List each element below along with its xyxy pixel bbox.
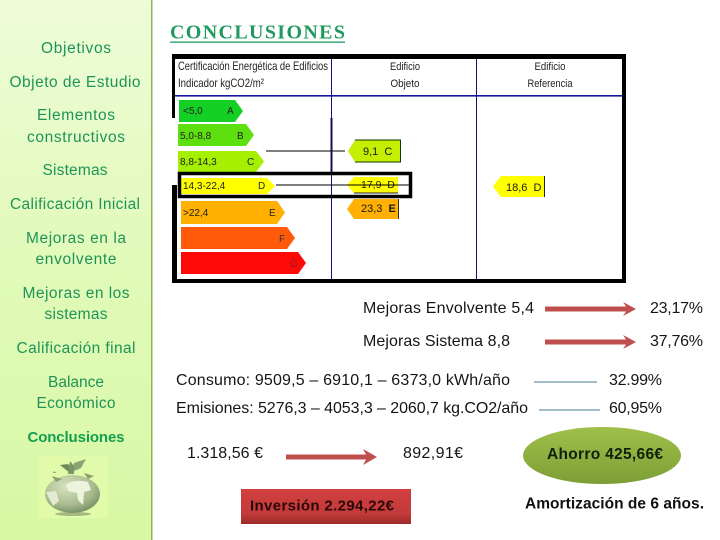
icon: green globe with plant bbox=[38, 456, 108, 518]
rating bar C bbox=[178, 151, 264, 172]
rating bar D: 14,3-22,4 bbox=[183, 181, 226, 192]
title: CONCLUSIONES bbox=[170, 22, 345, 44]
chart: energy certification table bbox=[172, 54, 626, 283]
tag: building C 9.1 bbox=[348, 140, 400, 162]
table header: edificio referencia bbox=[528, 61, 573, 90]
nav item: Mejoras en los sistemas bbox=[22, 285, 130, 323]
table header: edificio referencia: Edificio bbox=[534, 61, 566, 73]
nav item: Elementos constructivos: constructivos bbox=[27, 129, 125, 146]
arrow: sistema bbox=[545, 335, 636, 349]
rating bar G: G bbox=[290, 259, 298, 270]
table header: edificio referencia: Referencia bbox=[528, 78, 573, 90]
nav item: Balance Económico: Balance bbox=[48, 374, 104, 391]
nav item: Mejoras en los sistemas: sistemas bbox=[44, 306, 108, 323]
rating bar A: <5,0 bbox=[183, 106, 203, 117]
arrow: coste bbox=[286, 449, 377, 465]
text: emisiones: Emisiones: 5276,3 – 4053,3 – 2060,7 kg.CO2/año bbox=[176, 400, 528, 417]
line: emisiones bbox=[539, 410, 600, 411]
text: coste inicial: 1.318,56 € bbox=[187, 445, 263, 462]
nav item: Objeto de Estudio: Objeto de Estudio bbox=[10, 74, 140, 91]
nav item: Mejoras en los sistemas: Mejoras en los bbox=[22, 285, 130, 302]
nav item: Balance Económico bbox=[36, 374, 116, 412]
table header: indicator: Certificación Energética de Edificios bbox=[178, 59, 328, 73]
value: 37,76%: 37,76% bbox=[650, 333, 703, 350]
rating bar G bbox=[181, 252, 306, 274]
rating bar B: B bbox=[237, 131, 244, 142]
value: 60,95%: 60,95% bbox=[609, 400, 662, 417]
table header: edificio objeto: Objeto bbox=[390, 78, 420, 90]
tag: building E 23.3 bbox=[347, 199, 399, 219]
nav item: Elementos constructivos: Elementos bbox=[37, 107, 115, 124]
tag: building D 17.9: 17,9 D bbox=[361, 179, 395, 191]
text: mejoras envolvente: Mejoras Envolvente 5,4 bbox=[363, 300, 534, 317]
nav item: Elementos constructivos bbox=[27, 107, 125, 146]
badge: ahorro bbox=[523, 427, 681, 484]
text: amortizacion: Amortización de 6 años. bbox=[525, 496, 704, 512]
rating bar A bbox=[179, 100, 243, 122]
nav item: Conclusiones: Conclusiones bbox=[28, 429, 124, 446]
nav item: Balance Económico: Económico bbox=[36, 395, 116, 412]
table header: indicator bbox=[178, 59, 328, 90]
tag: building E 23.3: 23,3 E bbox=[361, 203, 396, 215]
rating bar F bbox=[181, 227, 295, 249]
tag: reference D 18.6 bbox=[493, 176, 545, 197]
rating bar D: D bbox=[258, 181, 265, 192]
rating bar E bbox=[181, 201, 285, 224]
table header: indicator: Indicador kgCO2/m² bbox=[178, 76, 264, 90]
value: 32.99%: 32.99% bbox=[609, 372, 662, 389]
box: inversion bbox=[241, 489, 411, 524]
panel: sidebar navigation bbox=[0, 0, 152, 540]
tag: building D 17.9 bbox=[347, 177, 398, 193]
text: mejoras sistema: Mejoras Sistema 8,8 bbox=[363, 333, 510, 350]
rating bar A: A bbox=[227, 106, 234, 117]
nav item: Calificación Inicial: Calificación Inicial bbox=[10, 196, 140, 213]
rating bar E: E bbox=[269, 208, 276, 219]
nav item: Mejoras en la envolvente: envolvente bbox=[36, 251, 116, 268]
text: coste final: 892,91€ bbox=[403, 445, 463, 462]
rating bar B: 5,0-8,8 bbox=[180, 131, 212, 142]
line: consumo bbox=[534, 382, 597, 383]
table header: edificio objeto bbox=[390, 61, 420, 90]
rating bar E: >22,4 bbox=[183, 208, 209, 219]
nav item: Objetivos: Objetivos bbox=[41, 40, 111, 57]
badge: ahorro: Ahorro 425,66€ bbox=[547, 446, 663, 463]
nav item: Calificación final: Calificación final bbox=[16, 340, 136, 357]
leader line C bbox=[266, 150, 345, 152]
nav item: Mejoras en la envolvente bbox=[26, 230, 126, 268]
box: inversion: Inversión 2.294,22€ bbox=[250, 498, 395, 514]
value: 23,17%: 23,17% bbox=[650, 300, 703, 317]
nav item: Sistemas: Sistemas bbox=[42, 162, 108, 179]
highlight frame around row D bbox=[180, 174, 410, 196]
rating bar C: C bbox=[247, 157, 254, 168]
rating bar F: F bbox=[279, 234, 285, 245]
text: consumo: Consumo: 9509,5 – 6910,1 – 6373,0 kWh/año bbox=[176, 372, 510, 389]
rating bar C: 8,8-14,3 bbox=[180, 157, 217, 168]
tag: reference D 18.6: 18,6 D bbox=[506, 182, 542, 194]
nav item: Mejoras en la envolvente: Mejoras en la bbox=[26, 230, 126, 247]
rating bar B bbox=[178, 124, 254, 146]
table header: edificio objeto: Edificio bbox=[390, 61, 420, 73]
rating bar D bbox=[181, 178, 275, 194]
arrow: envolvente bbox=[545, 302, 636, 316]
tag: building C 9.1: 9,1 C bbox=[363, 146, 392, 158]
